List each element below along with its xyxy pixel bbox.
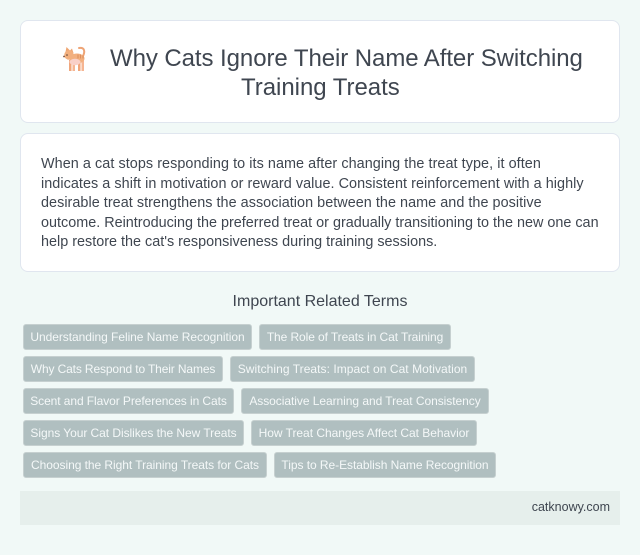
tag	[259, 324, 451, 350]
tag	[274, 452, 496, 478]
tag list	[23, 324, 496, 478]
footer bar	[20, 491, 620, 525]
description text: desirable treat strengthens the association between the name and the positive	[41, 195, 542, 211]
tag	[23, 324, 252, 350]
tag	[23, 452, 267, 478]
tag	[230, 356, 475, 382]
tag: Understanding Feline Name Recognition	[30, 330, 245, 344]
panel: description card	[20, 133, 620, 272]
tag: Switching Treats: Impact on Cat Motivation	[238, 362, 467, 376]
title line 2: Training Treats	[241, 74, 400, 101]
heading: important related terms: Important Related Terms	[233, 293, 407, 310]
tag	[23, 356, 223, 382]
description text: indicates a shift in motivation or reward value. Consistent reinforcement with a highly	[41, 176, 584, 192]
description text	[41, 156, 599, 250]
description text: outcome. Reintroducing the preferred treat or gradually transitioning to the new one can	[41, 215, 599, 231]
tag: Associative Learning and Treat Consistency	[249, 394, 481, 408]
tag	[251, 420, 477, 446]
tag	[241, 388, 489, 414]
tag	[23, 388, 234, 414]
tag: How Treat Changes Affect Cat Behavior	[259, 426, 469, 440]
description text: When a cat stops responding to its name after changing the treat type, it often	[41, 156, 541, 172]
description text: help restore the cat's responsiveness during training sessions.	[41, 234, 437, 250]
icon: cat	[63, 46, 86, 71]
tag: Signs Your Cat Dislikes the New Treats	[30, 426, 237, 440]
tag: Choosing the Right Training Treats for Cats	[31, 458, 259, 472]
panel: title card	[20, 20, 620, 123]
tag: The Role of Treats in Cat Training	[267, 330, 443, 344]
title line 1: Why Cats Ignore Their Name After Switching	[110, 45, 583, 72]
tag: Scent and Flavor Preferences in Cats	[30, 394, 227, 408]
tag: Why Cats Respond to Their Names	[31, 362, 215, 376]
tag: Tips to Re-Establish Name Recognition	[281, 458, 489, 472]
tag	[23, 420, 244, 446]
footer: site name: catknowy.com	[532, 500, 610, 514]
